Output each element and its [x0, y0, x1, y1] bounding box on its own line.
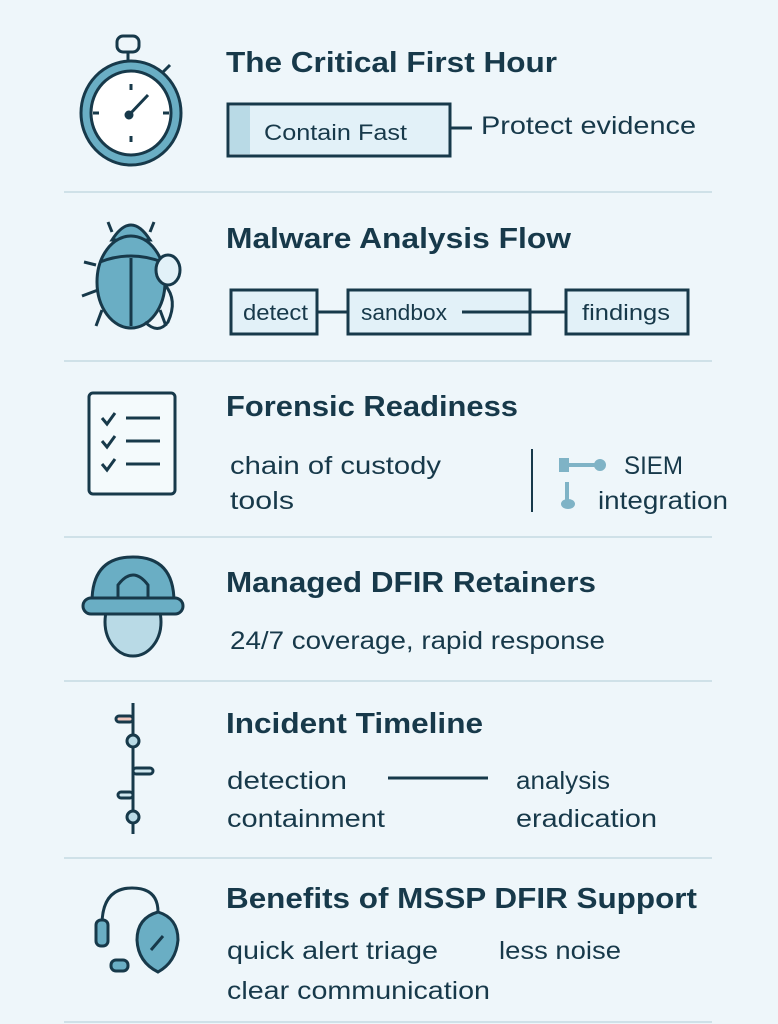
text: benefits: quick alert triage [227, 937, 438, 965]
panel: malware analysis flow [82, 222, 688, 334]
panel: critical first hour [81, 36, 696, 165]
title: Benefits of MSSP DFIR Support [226, 883, 697, 915]
panel: forensic readiness: tools [230, 487, 294, 515]
panel: malware analysis flow: findings [582, 300, 670, 325]
icon: bug [82, 222, 180, 328]
icon: helmet [83, 557, 183, 656]
box: contain fast: Contain Fast [264, 120, 407, 145]
panel: incident timeline: containment [227, 805, 385, 833]
flow boxes [231, 290, 688, 334]
title: The Critical First Hour [226, 47, 557, 79]
text: protect evidence: Protect evidence [481, 112, 696, 140]
panel: incident timeline: analysis [516, 767, 610, 795]
panel: benefits: clear communication [227, 977, 490, 1005]
panel: incident timeline: eradication [516, 805, 657, 833]
title: Incident Timeline [226, 708, 483, 740]
box: contain fast [228, 104, 450, 156]
icon: headset shield [96, 888, 178, 972]
panel: managed DFIR retainers [83, 557, 605, 656]
panel: forensic readiness [89, 391, 728, 515]
text: chain of custody: chain of custody [230, 452, 442, 480]
panel: benefits [96, 883, 697, 1005]
panel: benefits: less noise [499, 937, 621, 965]
panel: malware analysis flow: detect [243, 300, 308, 325]
text: 24/7 coverage, rapid response [230, 627, 605, 655]
panel: forensic readiness: integration [598, 487, 728, 515]
text: stages: detection [227, 767, 347, 795]
title: Managed DFIR Retainers [226, 567, 596, 599]
text: SIEM integration: SIEM [624, 452, 683, 480]
title: Forensic Readiness [226, 391, 518, 423]
icon: timeline [116, 703, 153, 834]
icon: checklist [89, 393, 175, 494]
panel: incident timeline [116, 703, 657, 834]
icon: connector [561, 460, 604, 507]
icon: stopwatch [81, 36, 181, 165]
panel: malware analysis flow: sandbox [361, 300, 447, 325]
title: Malware Analysis Flow [226, 223, 571, 255]
